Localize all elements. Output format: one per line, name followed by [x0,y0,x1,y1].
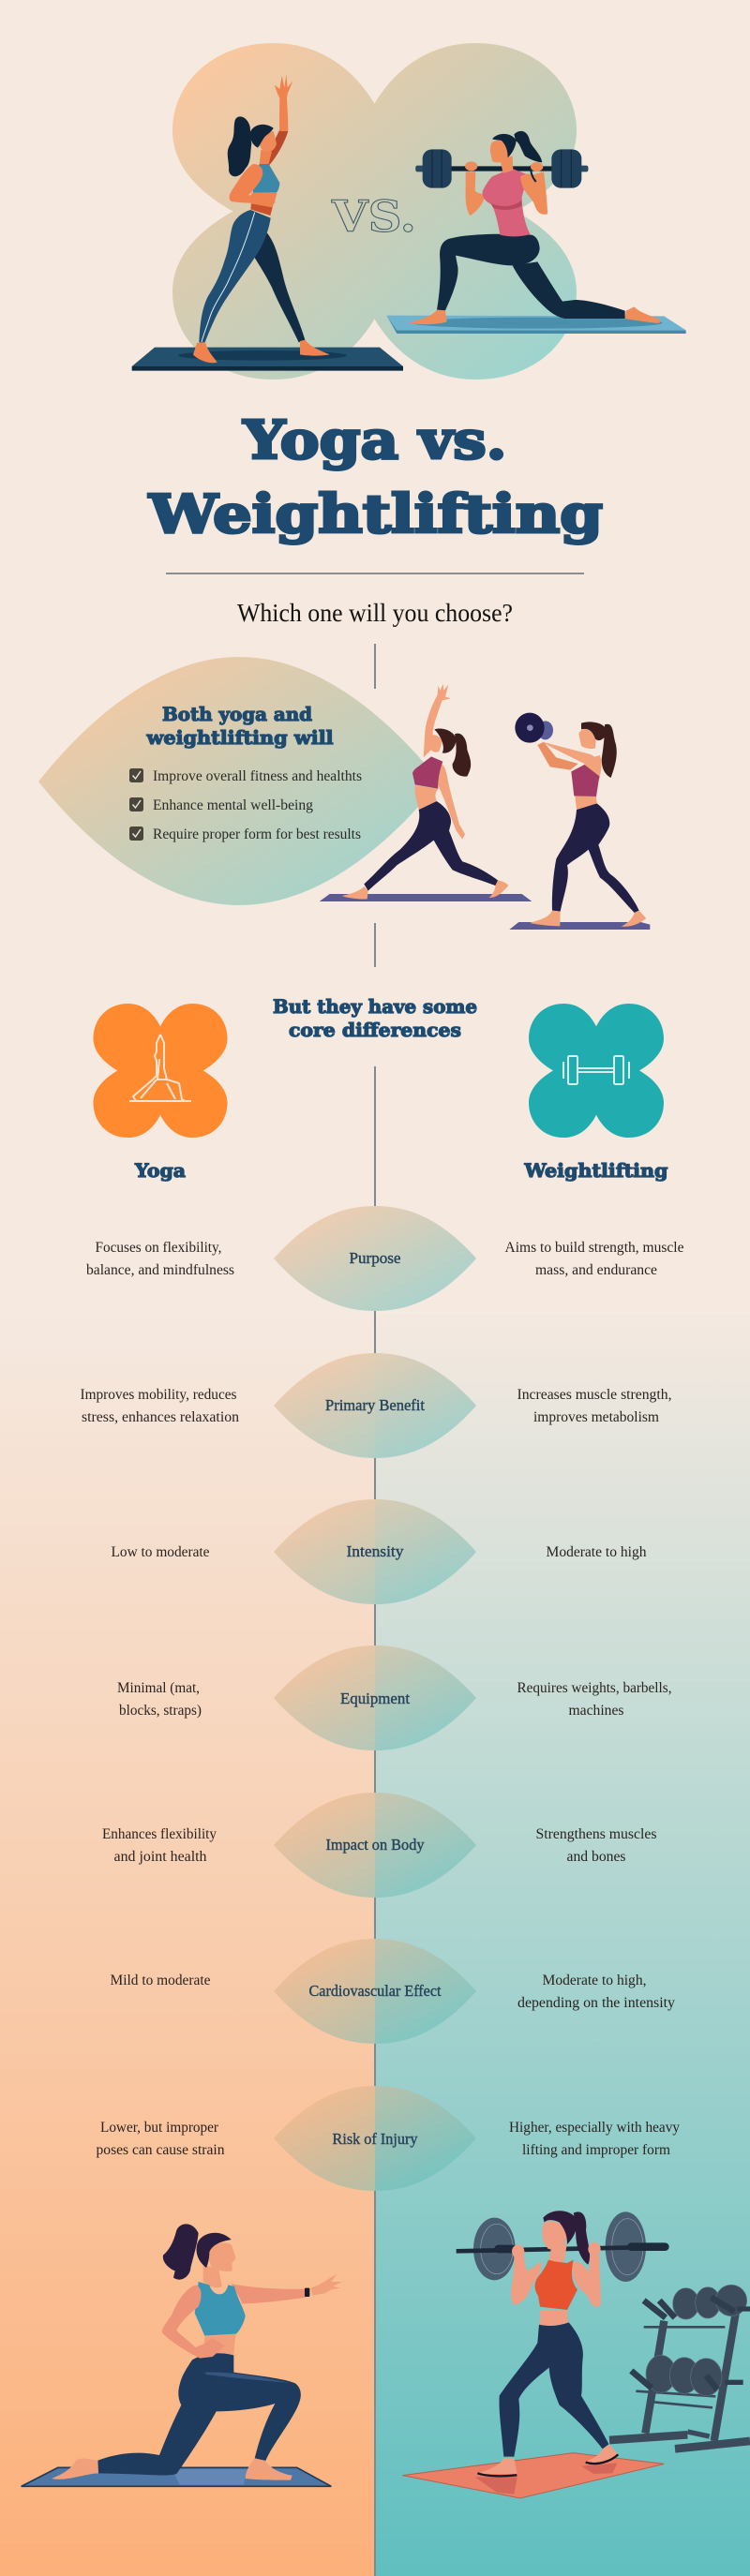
row: primary benefit: improves metabolism [533,1409,660,1425]
row: risk of injury: Risk of Injury [332,2130,418,2148]
row: impact on body: and joint health [114,1849,206,1865]
icon: yoga pose in orange flower [94,1004,227,1138]
row: purpose [86,1206,684,1311]
title: Weightlifting [148,484,603,545]
row: cardiovascular effect [111,1939,675,2044]
hero blob [172,43,577,380]
heading: core differences: But they have some [273,995,477,1018]
row: impact on body [102,1793,656,1898]
heading: both yoga and weightlifting: Both yoga and [162,703,312,725]
divider [166,573,584,574]
row: purpose: balance, and mindfulness [86,1262,234,1278]
checklist [129,768,362,842]
row: equipment: Minimal (mat, [117,1680,200,1696]
row: purpose: Aims to build strength, muscle [504,1240,684,1256]
illustration: woman with barbell and dumbbell rack [402,2211,750,2498]
row: equipment: machines [568,1703,624,1719]
heading: core differences [273,995,477,1041]
illustration: two women exercising [320,684,650,930]
row: cardiovascular effect: Mild to moderate [111,1973,210,1988]
row: intensity: Moderate to high [546,1544,647,1560]
row: risk of injury: Higher, especially with heavy [509,2120,680,2136]
row: primary benefit: stress, enhances relaxation [82,1409,239,1425]
label: weightlifting: Weightlifting [523,1159,668,1182]
checklist: Enhance mental well-being [153,797,313,813]
title [148,409,603,545]
title: Yoga vs. [242,409,506,471]
subtitle: Which one will you choose? [237,599,513,627]
row: primary benefit: Primary Benefit [325,1396,425,1414]
row: impact on body: Enhances flexibility [102,1826,217,1842]
label: yoga: Yoga [134,1159,186,1182]
row: cardiovascular effect: Cardiovascular Effect [309,1982,442,2000]
row: risk of injury: poses can cause strain [96,2142,225,2158]
row: equipment [117,1645,671,1750]
row: equipment: Equipment [340,1690,410,1707]
row: impact on body: Strengthens muscles [536,1826,656,1842]
row: cardiovascular effect: depending on the intensity [518,1995,675,2011]
row: primary benefit: Increases muscle strength, [518,1387,671,1403]
row: equipment: blocks, straps) [119,1703,202,1719]
row: purpose: mass, and endurance [535,1262,657,1278]
heading: core differences: core differences [289,1019,461,1041]
row: purpose: Purpose [349,1249,401,1267]
illustration: lunging woman with barbell [386,131,686,334]
row: risk of injury [96,2086,680,2191]
vs. outline label: VS. [331,191,416,242]
row: risk of injury: Lower, but improper [100,2120,219,2136]
center vertical lines [374,644,376,2576]
heading: both yoga and weightlifting: weightlifting will [145,726,334,749]
row: intensity: Intensity [347,1542,404,1560]
row: risk of injury: lifting and improper form [522,2142,671,2158]
row: purpose: Focuses on flexibility, [96,1240,221,1256]
row: equipment: Requires weights, barbells, [518,1680,671,1696]
row: impact on body: and bones [566,1849,626,1865]
row: impact on body: Impact on Body [326,1836,425,1854]
checklist: Improve overall fitness and healthts [153,768,362,784]
row: primary benefit [81,1353,671,1458]
row: intensity: Low to moderate [111,1544,210,1560]
icon: dumbbell in teal flower [529,1004,664,1138]
heading: both yoga and weightlifting [145,703,334,749]
row: cardiovascular effect: Moderate to high, [542,1973,647,1988]
row: primary benefit: Improves mobility, reduces [81,1387,236,1403]
illustration: yoga woman on mat [132,74,403,371]
row: intensity [111,1499,647,1604]
panel: shared benefits leaf [38,657,440,905]
illustration: kneeling yoga woman [22,2224,342,2486]
checklist: Require proper form for best results [153,826,361,842]
